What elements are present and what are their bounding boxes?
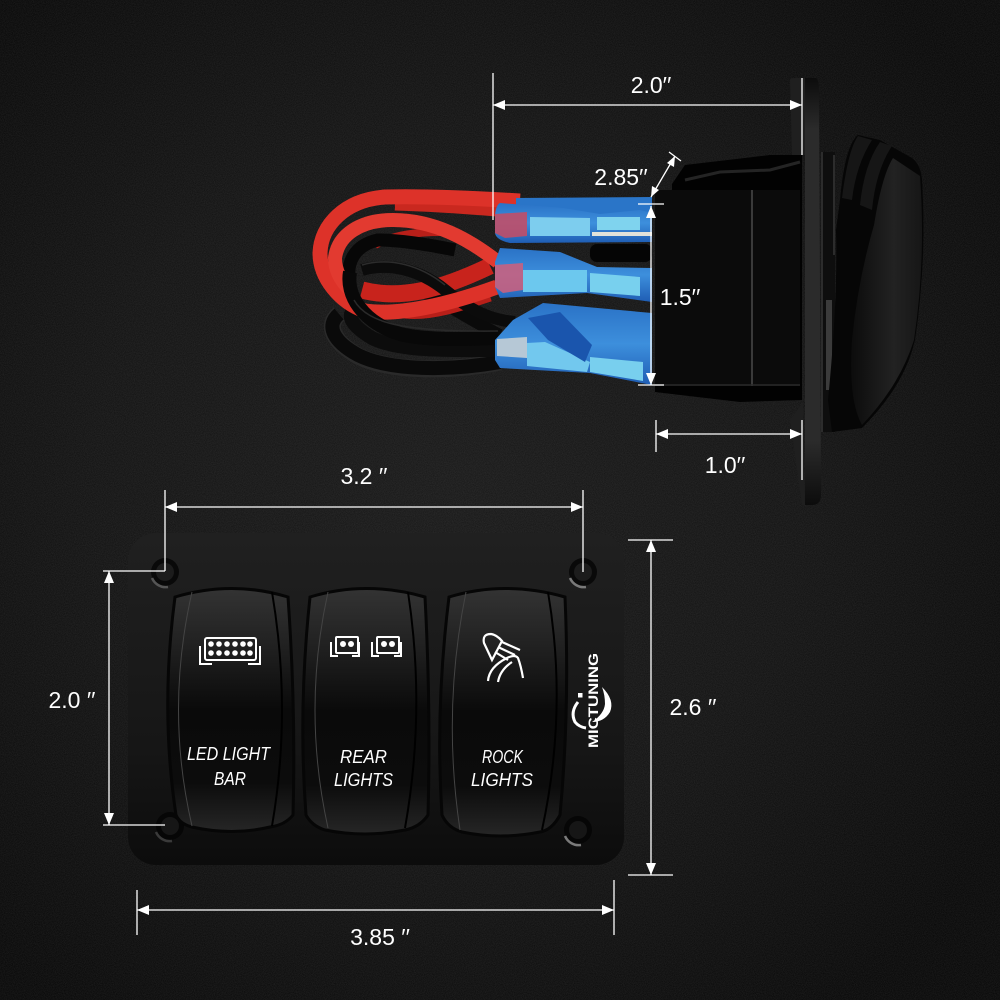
icon: rock light: [484, 634, 523, 682]
label: REAR LIGHTS: LIGHTS: [334, 769, 394, 790]
label: REAR LIGHTS: REAR: [340, 746, 387, 767]
brand logo: MICTUNING: [573, 653, 611, 748]
label: ROCK LIGHTS: [471, 746, 534, 790]
black wire between connectors: [590, 244, 652, 262]
bottom switch panel: [128, 533, 624, 865]
dimension: 3.2 in hole width: [165, 463, 583, 572]
dimension: 3.85 in panel width: [137, 880, 614, 950]
black wires (front): [349, 240, 515, 322]
dimension: 1.5 in height: [638, 206, 700, 385]
rocker 3: rock lights: [440, 588, 567, 836]
dimension: 1.5 in height: 1.5′′: [660, 284, 700, 310]
dimension: 3.85 in panel width: 3.85 ′′: [350, 924, 410, 950]
brand logo: MICTUNING: MICTUNING: [585, 653, 601, 748]
icon: LED bar: [200, 638, 260, 664]
red wire: outer loop: [320, 197, 520, 312]
rocker 1: LED light bar: [168, 588, 294, 832]
dimension: 2.85 in diagonal: 2.85′′: [594, 164, 648, 190]
blue crimp connectors: [495, 197, 652, 385]
label: REAR LIGHTS: [334, 746, 394, 790]
dimension: 2.0 in hole height: [48, 571, 165, 825]
label: LED LIGHT BAR: [187, 743, 271, 789]
label: LED LIGHT BAR: LED LIGHT: [187, 743, 271, 764]
black wire bundle (rear): [332, 290, 500, 369]
red wires (rear): [362, 203, 497, 314]
wiring harness: [320, 197, 520, 369]
icon: rear lights: [331, 637, 401, 656]
dimension: 2.85 in diagonal: [594, 152, 681, 204]
dimension: 2.6 in panel height: 2.6 ′′: [670, 694, 716, 720]
dimension: 2.0 in depth: [493, 72, 802, 220]
dimension: 2.0 in depth: 2.0′′: [631, 72, 671, 98]
red wire: inner loop: [335, 220, 498, 290]
dimension: 1.0 in body: 1.0′′: [705, 452, 745, 478]
label: LED LIGHT BAR: BAR: [214, 768, 246, 789]
dimension: 3.2 in hole width: 3.2 ′′: [340, 463, 388, 489]
side view mounting plate: [790, 78, 835, 505]
black wire: front loop: [349, 272, 498, 339]
dimension: 2.6 in panel height: [628, 540, 716, 875]
top rear connector: [516, 197, 652, 225]
side view rocker: [828, 135, 923, 432]
mounting screw holes: [151, 558, 597, 845]
bottom connector: [495, 303, 652, 385]
top connector: [495, 203, 652, 243]
switch body: [655, 155, 802, 402]
label: ROCK LIGHTS: ROCK: [482, 746, 524, 767]
middle connector: [495, 248, 652, 302]
dimension: 2.0 in hole height: 2.0 ′′: [48, 687, 96, 713]
dimension: 1.0 in body: [656, 420, 802, 480]
label: ROCK LIGHTS: LIGHTS: [471, 769, 534, 790]
rocker 2: rear lights: [303, 588, 429, 834]
